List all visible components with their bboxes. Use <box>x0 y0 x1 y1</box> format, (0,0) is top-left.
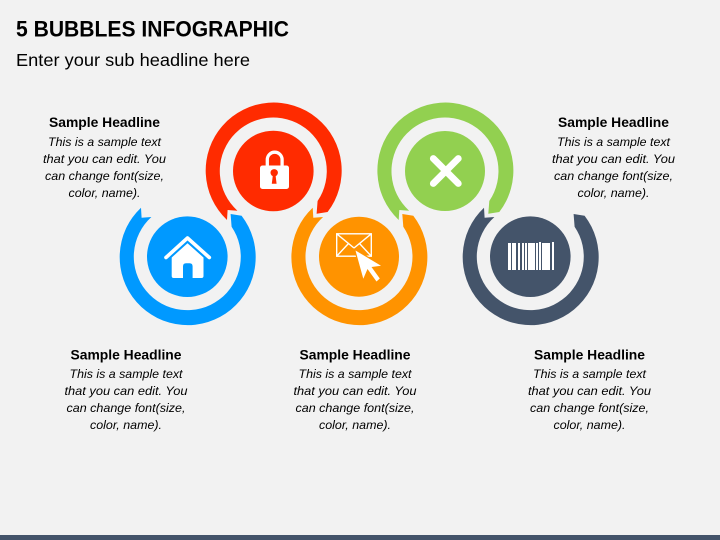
bubble: red lock <box>206 103 342 220</box>
text block: top left: can change font(size, <box>45 169 164 183</box>
title: 5 BUBBLES INFOGRAPHIC <box>16 16 289 42</box>
text block: bottom center: color, name). <box>319 418 391 432</box>
text block: bottom center: This is a sample text <box>298 367 412 381</box>
bubble: navy barcode <box>463 208 599 325</box>
text block: bottom center: Sample Headline <box>300 348 411 362</box>
text block: top right: Sample Headline <box>558 115 669 130</box>
bubble: orange mail <box>291 208 427 325</box>
text block: top left: that you can edit. You <box>43 152 166 166</box>
text block: bottom left: that you can edit. You <box>64 384 188 398</box>
text block: top right: can change font(size, <box>554 169 673 183</box>
text block: top left: Sample Headline <box>49 115 160 130</box>
text block: top left <box>43 115 166 200</box>
text block: top right <box>552 115 675 200</box>
text block: top left: color, name). <box>68 186 140 200</box>
text block: bottom right: can change font(size, <box>530 401 649 415</box>
text block: bottom left: Sample Headline <box>70 348 182 362</box>
bubble: blue home <box>120 208 256 325</box>
text block: bottom left: This is a sample text <box>70 367 183 381</box>
text block: bottom right: that you can edit. You <box>528 384 651 398</box>
text block: top right: color, name). <box>578 186 650 200</box>
icon: house <box>166 238 209 278</box>
icon: lock <box>260 152 289 189</box>
footer bar <box>0 535 720 540</box>
text block: top right: that you can edit. You <box>552 152 675 166</box>
text block: bottom center: that you can edit. You <box>294 384 417 398</box>
text block: bottom right: Sample Headline <box>534 348 645 362</box>
text block: bottom center: can change font(size, <box>296 401 414 415</box>
icon: barcode <box>508 242 554 270</box>
icon: cross <box>433 158 458 184</box>
text block: top right: This is a sample text <box>557 135 671 149</box>
icon: envelope with cursor <box>337 234 381 282</box>
text block: bottom right: This is a sample text <box>533 367 647 381</box>
text block: top left: This is a sample text <box>48 135 162 149</box>
text block: bottom right <box>528 348 651 432</box>
text block: bottom left: can change font(size, <box>66 401 186 415</box>
text block: bottom left <box>64 348 188 432</box>
text block: bottom right: color, name). <box>554 418 626 432</box>
text block: bottom left: color, name). <box>90 418 162 432</box>
text block: bottom center <box>294 348 417 432</box>
subtitle: Enter your sub headline here <box>16 50 250 70</box>
bubble: green cross <box>377 103 513 220</box>
